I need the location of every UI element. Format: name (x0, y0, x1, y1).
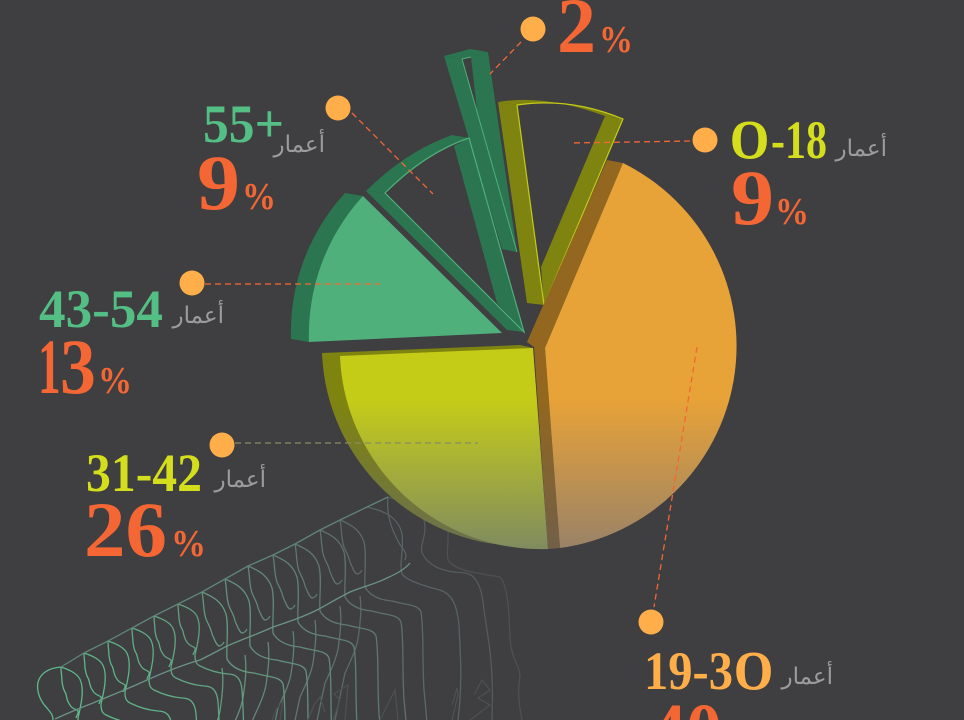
label 0-18: -18 (771, 110, 827, 170)
label 0-18: 9 (731, 154, 774, 241)
label 0-18: % (775, 191, 809, 233)
9% ring slice (366, 135, 524, 332)
slice 55+ group (366, 49, 524, 332)
label 43-54: 43-54 (39, 279, 163, 339)
label 0-18: أعمار (834, 133, 887, 162)
label 31-42: 31-42 (86, 443, 202, 503)
label 43-54: 3 (60, 324, 96, 411)
label 31-42: 26 (84, 486, 167, 573)
faded far heads (367, 497, 522, 720)
label 0-18: 0 (730, 110, 769, 170)
label 19-30: أعمار (780, 661, 833, 690)
neck line (55, 563, 410, 719)
leader line 55+ (352, 113, 433, 194)
dot 31-42 (210, 432, 234, 458)
label 31-42 (84, 443, 266, 573)
label 55+: 55+ (203, 94, 284, 154)
label 19-30 (644, 641, 833, 720)
near heads (61, 604, 248, 720)
value 2% (557, 0, 633, 69)
lower zigzags (272, 680, 490, 720)
label 43-54: % (98, 360, 132, 402)
label 55+ (197, 94, 325, 226)
leader line 0-18 (570, 141, 690, 143)
dot 0-18 (692, 128, 718, 152)
dot 2% (520, 16, 546, 42)
label 31-42: أعمار (213, 464, 266, 493)
label 43-54 (38, 279, 224, 411)
slice 31-42: 26% (322, 345, 548, 549)
leader line 31-42 (235, 442, 478, 444)
label 0-18 (730, 110, 887, 241)
slice 0-18: 9% outlined (498, 100, 623, 305)
label 43-54: أعمار (171, 300, 224, 329)
dot 55+ (326, 96, 350, 120)
label 19-30: 19-3 (644, 641, 733, 701)
first head back outline (38, 667, 61, 720)
dot 19-30 (638, 610, 664, 634)
label 19-30: 0 (734, 641, 773, 701)
pie chart (291, 49, 737, 549)
value 2%: % (599, 19, 633, 61)
mid heads (197, 520, 429, 720)
slice 43-54: 13% (291, 193, 502, 342)
label 31-42: % (171, 523, 206, 565)
label 55+: % (242, 176, 276, 218)
leader line 19-30 (654, 347, 697, 607)
leader line 2% (490, 42, 521, 74)
label 55+: 9 (197, 139, 240, 226)
head silhouettes illustration (38, 497, 522, 720)
top line (61, 497, 388, 667)
label 43-54: 1 (38, 323, 61, 410)
leader line 43-54 (205, 283, 380, 285)
dot 43-54 (180, 270, 204, 296)
2% slice (444, 49, 517, 252)
slice 19-30: 40% (527, 160, 737, 549)
label 55+: أعمار (272, 129, 325, 158)
